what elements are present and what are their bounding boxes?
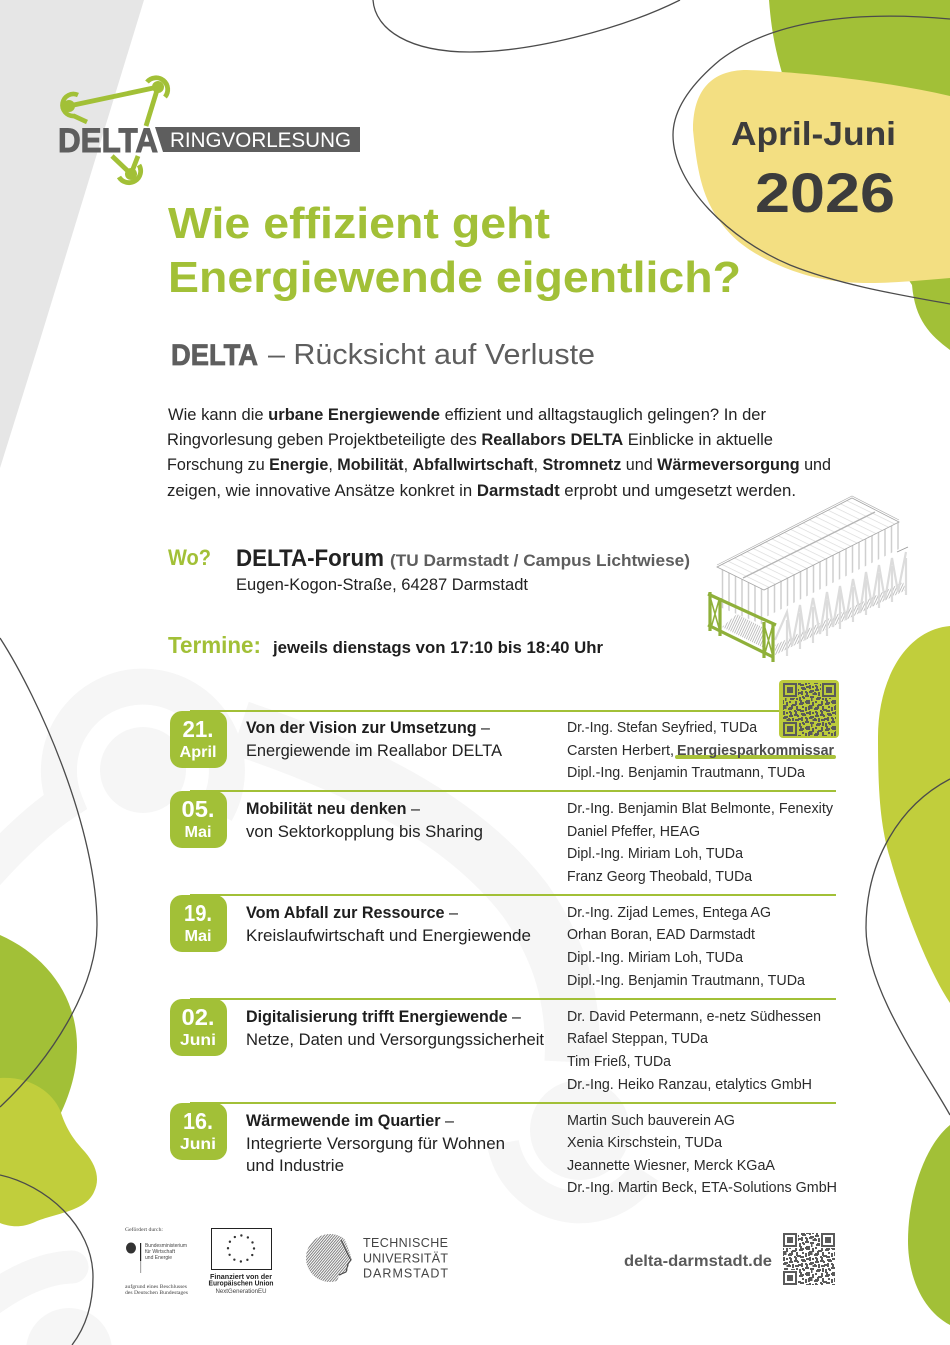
logo: TU Darmstadt — [306, 1233, 448, 1286]
date callout: 2026 — [755, 161, 895, 224]
logo: federal ministry: Gefördert durch: — [125, 1226, 163, 1233]
row 5: 16. — [183, 1108, 213, 1134]
logo — [58, 78, 360, 183]
row 5: Integrierte Versorgung für Wohnen — [246, 1134, 505, 1153]
row 1: April — [180, 744, 216, 761]
website: delta-darmstadt.de — [624, 1253, 772, 1270]
row 3: Mai — [184, 928, 212, 945]
title — [168, 199, 741, 302]
logo: european union: Finanziert von der — [210, 1274, 272, 1281]
row 5: und Industrie — [246, 1156, 344, 1175]
row 4: Dr. David Petermann, e-netz Südhessen — [567, 1009, 821, 1025]
row 2 — [170, 791, 836, 885]
row 1 — [170, 711, 834, 781]
row 4: Tim Frieß, TUDa — [567, 1054, 671, 1070]
location: Wo? — [168, 545, 211, 570]
intro text: Wie kann die urbane Energiewende effizient und alltagstauglich gelingen? In der — [168, 406, 767, 424]
row 3: Dipl.-Ing. Miriam Loh, TUDa — [567, 950, 743, 966]
row 3: Vom Abfall zur Ressource – — [246, 903, 459, 922]
logo wordmark: DELTA — [58, 122, 158, 160]
row 5: Jeannette Wiesner, Merck KGaA — [567, 1158, 775, 1174]
logo subtitle: RINGVORLESUNG — [170, 128, 351, 152]
row 5: Dr.-Ing. Martin Beck, ETA-Solutions GmbH — [567, 1180, 837, 1196]
row 1: Dipl.-Ing. Benjamin Trautmann, TUDa — [567, 765, 805, 781]
watermark logo — [0, 687, 645, 1345]
date callout — [731, 115, 896, 224]
logo: TU Darmstadt: UNIVERSITÄT — [363, 1252, 448, 1266]
dates intro: jeweils dienstags von 17:10 bis 18:40 Uhr — [272, 638, 603, 657]
building floor — [775, 582, 906, 655]
blob: right green — [908, 1125, 950, 1325]
intro text: zeigen, wie innovative Ansätze konkret in Darmstadt erprobt und umgesetzt werden. — [167, 482, 796, 500]
row 3: Dr.-Ing. Zijad Lemes, Entega AG — [567, 905, 771, 921]
qr code: schedule — [779, 680, 839, 738]
logo: federal ministry: aufgrund eines Beschlusses — [125, 1283, 187, 1290]
row 1: Dr.-Ing. Stefan Seyfried, TUDa — [567, 720, 757, 736]
logo: TU Darmstadt: DARMSTADT — [363, 1266, 448, 1280]
intro text: Forschung zu Energie, Mobilität, Abfallwirtschaft, Stromnetz und Wärmeversorgung und — [167, 456, 831, 474]
building side frames — [775, 552, 906, 656]
dates intro: Termine: — [168, 632, 261, 658]
row 5: Xenia Kirschstein, TUDa — [567, 1135, 722, 1151]
row 3: Orhan Boran, EAD Darmstadt — [567, 927, 755, 943]
row 2: Mai — [184, 824, 212, 841]
building entrance floor — [722, 614, 764, 648]
qr code: website — [783, 1233, 835, 1285]
row 2: Franz Georg Theobald, TUDa — [567, 869, 752, 885]
row 5: Martin Such bauverein AG — [567, 1113, 735, 1129]
row 2: Mobilität neu denken – — [246, 799, 421, 818]
row 1: 21. — [182, 716, 214, 742]
logo: federal ministry: für Wirtschaft — [145, 1249, 176, 1255]
row 4: Rafael Steppan, TUDa — [567, 1031, 708, 1047]
row 1: Energiesparkommissar — [677, 743, 834, 759]
subtitle: – Rücksicht auf Verluste — [268, 339, 595, 371]
row 3: Dipl.-Ing. Benjamin Trautmann, TUDa — [567, 973, 805, 989]
location — [168, 545, 690, 594]
logo: federal ministry: und Energie — [145, 1255, 172, 1261]
logo: federal ministry: Bundesministerium — [145, 1243, 187, 1249]
dates intro — [168, 632, 603, 658]
location: DELTA-Forum — [236, 545, 384, 572]
building illustration — [708, 496, 908, 662]
logo bar — [155, 127, 360, 152]
logo: european union: NextGenerationEU — [216, 1289, 266, 1295]
row 2: von Sektorkopplung bis Sharing — [246, 822, 483, 841]
intro text: Ringvorlesung geben Projektbeteiligte des Reallabors DELTA Einblicke in aktuelle — [167, 431, 773, 449]
row 4: Netze, Daten und Versorgungssicherheit — [246, 1030, 544, 1049]
row 4: Juni — [180, 1032, 216, 1049]
row 2: Daniel Pfeffer, HEAG — [567, 824, 700, 840]
row 4: 02. — [182, 1004, 214, 1030]
logo: federal ministry — [125, 1226, 188, 1296]
row 5: Juni — [180, 1136, 216, 1153]
building roof — [717, 498, 899, 590]
row 4: Digitalisierung trifft Energiewende – — [246, 1007, 522, 1026]
row 3 — [170, 895, 836, 989]
title: Wie effizient geht — [168, 199, 550, 248]
building green frame — [708, 592, 776, 662]
row 5: Wärmewende im Quartier – — [246, 1111, 455, 1130]
logo: european union — [208, 1228, 274, 1295]
schedule — [170, 711, 837, 1196]
date callout: April-Juni — [731, 115, 896, 152]
logo network — [62, 78, 168, 183]
logo: european union: Europäischen Union — [208, 1280, 274, 1288]
blob: left lime — [0, 1078, 97, 1226]
row 3: Kreislaufwirtschaft und Energiewende — [246, 926, 531, 945]
blob: top right yellow — [693, 70, 950, 283]
row 1: Carsten Herbert, — [567, 743, 674, 759]
row 3: 19. — [184, 900, 212, 926]
location: Eugen-Kogon-Straße, 64287 Darmstadt — [236, 576, 528, 594]
subtitle: DELTA — [171, 339, 258, 372]
blob: top right green — [769, 0, 950, 350]
blob: right lime — [878, 626, 950, 1003]
row 4: Dr.-Ing. Heiko Ranzau, etalytics GmbH — [567, 1077, 812, 1093]
logo: TU Darmstadt: TECHNISCHE — [363, 1236, 448, 1250]
building walls — [717, 567, 764, 625]
location: (TU Darmstadt / Campus Lichtwiese) — [390, 551, 690, 570]
row 1: Energiewende im Reallabor DELTA — [246, 741, 503, 760]
row 2: 05. — [182, 796, 214, 822]
blob: left green — [0, 935, 77, 1130]
row 2: Dipl.-Ing. Miriam Loh, TUDa — [567, 846, 743, 862]
row 1: Von der Vision zur Umsetzung – — [246, 718, 491, 737]
row 5 — [170, 1103, 837, 1196]
intro text — [167, 406, 831, 500]
logo: federal ministry: des Deutschen Bundestages — [125, 1290, 188, 1296]
title: Energiewende eigentlich? — [168, 253, 741, 302]
row 2: Dr.-Ing. Benjamin Blat Belmonte, Fenexity — [567, 801, 834, 817]
background wedge — [0, 0, 144, 468]
row 4 — [170, 999, 836, 1093]
